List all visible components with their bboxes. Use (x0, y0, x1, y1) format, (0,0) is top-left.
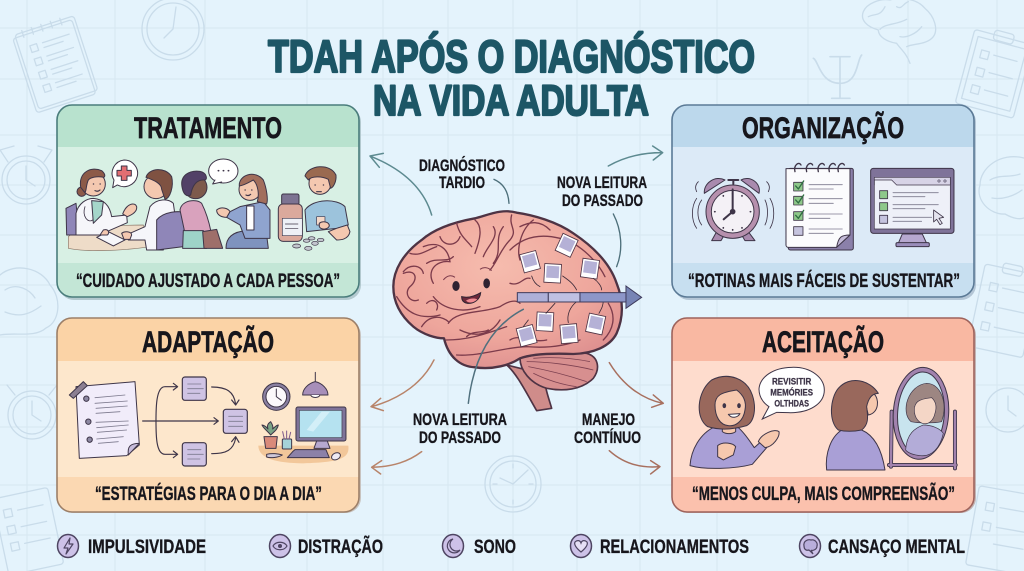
legend (58, 534, 965, 558)
woman facing mirror (826, 380, 885, 470)
doodle: notepad bottom right (965, 486, 1024, 571)
legend item: relacionamentos (570, 534, 749, 558)
patient with back turned (122, 170, 185, 250)
heading: tratamento: TRATAMENTO (134, 112, 282, 145)
doodle: brain left (0, 268, 58, 335)
legend item: distração (270, 534, 383, 558)
bubble: memories: MEMÓRIES (770, 386, 813, 397)
icon: monitor with checklist (871, 168, 954, 247)
title line 2: NA VIDA ADULTA (373, 77, 649, 125)
arrow: to organização (608, 146, 663, 166)
panel: adaptação (57, 318, 361, 513)
legend item: impulsividade (58, 534, 206, 558)
label: nova leitura lower (413, 410, 507, 447)
label: nova leitura upper: NOVA LEITURA (557, 173, 647, 192)
heading: aceitação: ACEITAÇÃO (762, 325, 884, 359)
label: nova leitura lower: DO PASSADO (419, 428, 501, 447)
label: diagnóstico tardio: DIAGNÓSTICO (419, 156, 505, 175)
label: diagnóstico tardio (419, 156, 505, 192)
arrow: to tratamento (370, 153, 432, 215)
cerebellum (520, 353, 598, 390)
brain stem (507, 365, 552, 411)
quote: adaptação: “ESTRATÉGIAS PARA O DIA A DIA” (95, 483, 322, 505)
man with pills (305, 167, 350, 240)
doodle: psi (813, 55, 862, 98)
legend item: impulsividade: IMPULSIVIDADE (88, 537, 206, 558)
curved arrows (370, 146, 663, 474)
label: diagnóstico tardio: TARDIO (439, 173, 485, 192)
legend item: cansaço mental (800, 534, 965, 558)
bubble: memories (759, 367, 824, 419)
panel: tratamento (57, 105, 361, 300)
arrow: manejo contínuo (609, 451, 660, 474)
bubble: memories: REVISITIR (772, 376, 812, 386)
heading: organização: ORGANIZAÇÃO (742, 111, 904, 145)
connector: nova leitura lower (468, 309, 523, 403)
doodle: clipboard right (968, 259, 1024, 358)
icon: alarm clock (692, 178, 774, 241)
pills (293, 237, 324, 250)
label: nova leitura lower: NOVA LEITURA (413, 410, 507, 429)
doodle: alarm clock right (986, 388, 1024, 432)
pill bottle (278, 194, 302, 241)
legend item: sono: SONO (474, 537, 516, 558)
title (268, 31, 755, 125)
arrow: to adaptação (371, 360, 434, 411)
arrow: nova leitura to adaptação (372, 452, 422, 474)
legend item: cansaço mental: CANSAÇO MENTAL (828, 537, 965, 558)
icon: desk with computer (258, 372, 348, 463)
label: nova leitura upper: DO PASSADO (562, 191, 643, 210)
bubble: dots (209, 159, 238, 184)
label: manejo contínuo (574, 410, 641, 447)
flow diagram (143, 377, 247, 466)
mirror (889, 366, 956, 468)
illustration: care team (66, 159, 350, 251)
face (443, 268, 492, 303)
icon: taped note (69, 382, 139, 458)
connector: nova leitura upper (613, 214, 621, 267)
quote: tratamento: “CUIDADO AJUSTADO A CADA PESSOA” (76, 271, 340, 292)
heading: adaptação: ADAPTAÇÃO (142, 325, 274, 359)
woman (217, 174, 270, 248)
legend item: distração: DISTRAÇÃO (298, 536, 383, 558)
legend item: relacionamentos: RELACIONAMENTOS (600, 537, 749, 558)
bubble: cross (112, 160, 138, 188)
icon: checklist notepad (786, 163, 853, 250)
panel: aceitação (672, 318, 976, 513)
legend item: sono (442, 534, 516, 558)
panel: organização (672, 105, 976, 300)
doodle: brain right (979, 157, 1024, 219)
doodle: alarm clock left (0, 146, 52, 204)
memory photos (516, 233, 606, 347)
doodle: notepad bottom left (0, 487, 64, 571)
doctor (66, 169, 137, 246)
doodle: clock top (142, 0, 204, 60)
label: manejo contínuo: MANEJO (582, 410, 635, 429)
table (68, 225, 150, 251)
doodle: notepad top left (11, 14, 99, 113)
woman speaking (690, 376, 779, 468)
central brain (393, 211, 642, 411)
brain folds (397, 215, 613, 355)
title line 1: TDAH APÓS O DIAGNÓSTICO (268, 31, 755, 82)
label: nova leitura upper (557, 173, 647, 210)
timeline arrow (517, 286, 642, 308)
doodle: clock left (7, 385, 57, 439)
connector: diagnóstico tardio (494, 179, 509, 203)
arrow: to aceitação (609, 363, 663, 407)
brain cortex (393, 211, 622, 368)
doodle: clipboard top right (955, 25, 1024, 118)
small link arrows (523, 276, 603, 327)
label: manejo contínuo: CONTÍNUO (574, 428, 641, 447)
doodle: brain top right (862, 0, 936, 63)
doodle: clock bottom (485, 456, 541, 512)
child (180, 171, 223, 248)
bubble: memories: OLTHDAS (774, 399, 809, 409)
